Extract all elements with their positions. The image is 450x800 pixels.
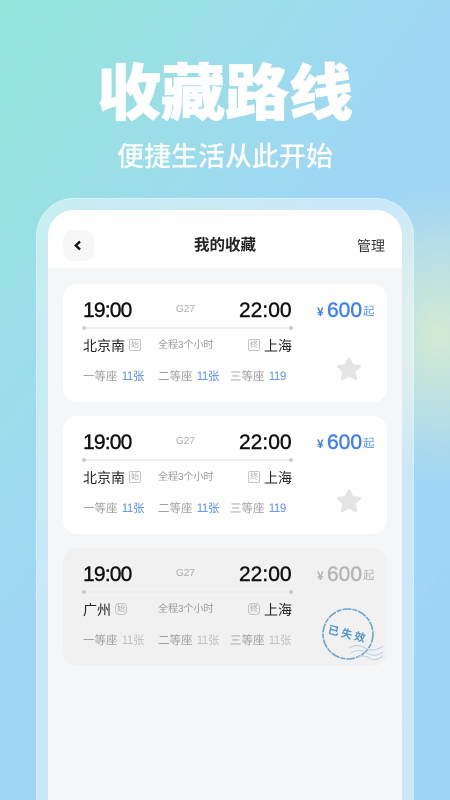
route card 3: expired bbox=[63, 548, 387, 666]
route card 1: 600 bbox=[327, 299, 362, 322]
route card 1: 22:00 bbox=[239, 299, 292, 322]
route card 3: expired: 三等座 11张 bbox=[230, 635, 291, 647]
icon: star bbox=[337, 489, 361, 512]
route card 2: 三等座 119 bbox=[230, 503, 286, 515]
screen heading: 我的收藏 bbox=[194, 237, 256, 254]
route card 2: 全程3个小时 bbox=[158, 472, 214, 483]
stamp: expired bbox=[322, 608, 384, 660]
route card 2: G27 bbox=[176, 436, 195, 447]
route card 1: 二等座 11张 bbox=[158, 371, 219, 383]
route card 1: 19:00 bbox=[83, 299, 132, 322]
route card 1: G27 bbox=[176, 304, 195, 315]
route card 3: expired: 终 bbox=[250, 604, 258, 613]
route card 1: 三等座 119 bbox=[230, 371, 286, 383]
route card 1: 终 bbox=[250, 340, 258, 349]
route card 2: 一等座 11张 bbox=[83, 503, 144, 515]
route card 1: 起 bbox=[363, 306, 374, 318]
back button bbox=[63, 230, 94, 261]
route card 1: 上海 bbox=[264, 338, 292, 354]
app screen bbox=[48, 210, 402, 800]
route card 2: ¥ bbox=[317, 437, 324, 451]
route card 2: 起 bbox=[363, 438, 374, 450]
route card 1: ¥ bbox=[317, 305, 324, 319]
route card 2: 22:00 bbox=[239, 431, 292, 454]
phone frame bbox=[36, 198, 414, 800]
route card 2: 终 bbox=[250, 472, 258, 481]
route card 1 bbox=[63, 284, 387, 402]
icon: star bbox=[337, 357, 361, 380]
route card 3: expired: 600 bbox=[327, 563, 362, 586]
route card 3: expired: 二等座 11张 bbox=[158, 635, 219, 647]
route card 2: 始 bbox=[131, 472, 139, 481]
route card 3: expired: 广州 bbox=[83, 602, 111, 618]
route card 3: expired: 一等座 11张 bbox=[83, 635, 144, 647]
route card 1: 全程3个小时 bbox=[158, 340, 214, 351]
route card 3: expired: 起 bbox=[363, 570, 374, 582]
route card 2: 北京南 bbox=[83, 470, 125, 486]
route card 2: 二等座 11张 bbox=[158, 503, 219, 515]
route card 3: expired: 19:00 bbox=[83, 563, 132, 586]
route card 3: expired: G27 bbox=[176, 568, 195, 579]
route card 3: expired: 22:00 bbox=[239, 563, 292, 586]
route card 1: 始 bbox=[131, 340, 139, 349]
route card 2: 上海 bbox=[264, 470, 292, 486]
route card 2: 19:00 bbox=[83, 431, 132, 454]
route card 3: expired: 全程3个小时 bbox=[158, 604, 214, 615]
subtitle: 便捷生活从此开始 bbox=[117, 135, 333, 174]
route card 2: 600 bbox=[327, 431, 362, 454]
route card 3: expired: 上海 bbox=[264, 602, 292, 618]
title: 收藏路线 bbox=[97, 45, 353, 133]
route card 1: 北京南 bbox=[83, 338, 125, 354]
navigation bar bbox=[48, 210, 402, 268]
route card 3: expired: 始 bbox=[117, 604, 125, 613]
route card 2 bbox=[63, 416, 387, 534]
route card 1: 一等座 11张 bbox=[83, 371, 144, 383]
stamp: expired: 已失效 bbox=[326, 621, 370, 647]
manage link: 管理 bbox=[357, 238, 385, 254]
route card 3: expired: ¥ bbox=[317, 569, 324, 583]
